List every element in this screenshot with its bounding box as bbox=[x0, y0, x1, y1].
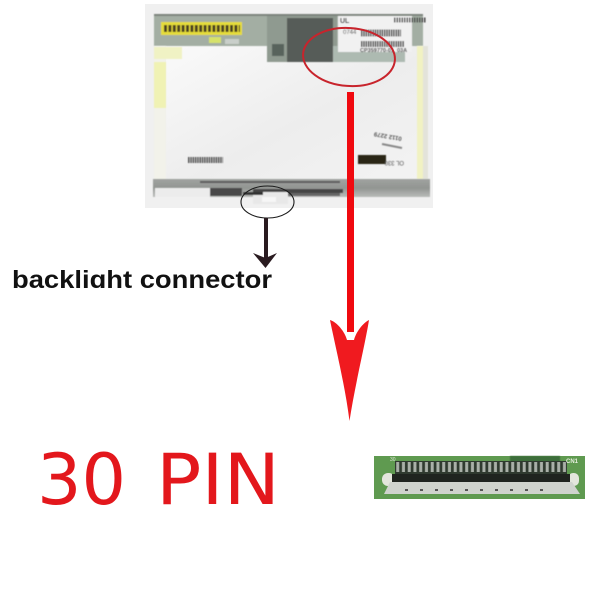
heading: 30 PIN: PIN bbox=[156, 439, 280, 521]
top circuit board strip: 03A bbox=[397, 48, 407, 54]
metal clamp bbox=[384, 482, 580, 494]
trace cluster bbox=[510, 456, 560, 462]
screen markings: OL 330 bbox=[384, 159, 404, 165]
top circuit board strip bbox=[154, 14, 426, 62]
black arrow bbox=[253, 218, 277, 268]
heading: 30 PIN: 30 bbox=[37, 439, 126, 521]
top circuit board strip: 0744 bbox=[343, 30, 357, 36]
LCD screen bbox=[166, 44, 420, 180]
panel: LCD photo bbox=[145, 4, 433, 208]
heading: 30 PIN bbox=[37, 439, 280, 521]
connector photo bbox=[374, 456, 585, 499]
connector photo: 30 bbox=[390, 457, 396, 463]
red arrow bbox=[330, 92, 369, 421]
pin labels: CN1 bbox=[566, 459, 579, 465]
top circuit board strip: UL bbox=[340, 18, 350, 25]
white product label bbox=[338, 16, 412, 52]
black ellipse callout bbox=[241, 186, 294, 218]
label: backlight connector: backlight connector bbox=[12, 266, 272, 294]
top circuit board strip: CP359770-01 bbox=[360, 48, 394, 54]
yellow label bbox=[161, 22, 242, 35]
red ellipse callout bbox=[301, 25, 397, 89]
pins bbox=[395, 461, 567, 476]
screen markings bbox=[188, 130, 404, 165]
left and right yellow tape bbox=[154, 46, 428, 180]
screen markings: 0112 2279 bbox=[373, 130, 402, 141]
bottom metal bar bbox=[153, 179, 430, 204]
